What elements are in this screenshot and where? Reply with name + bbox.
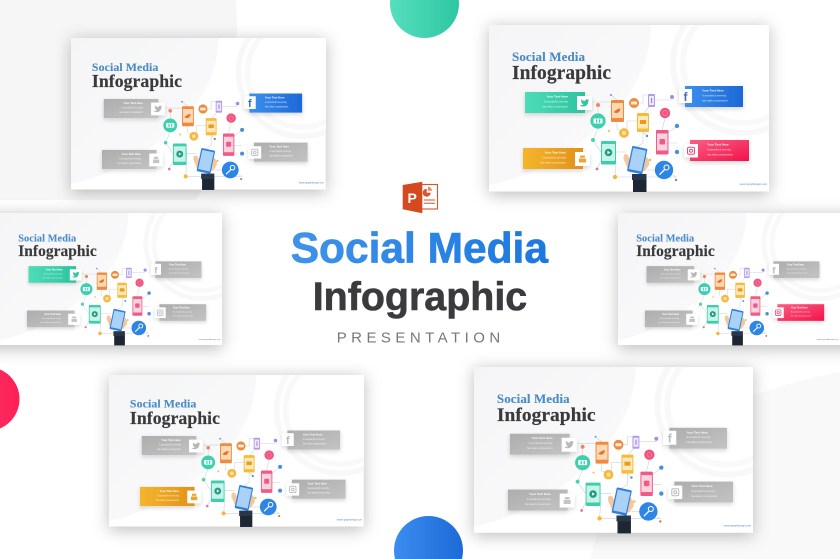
slide 5 callout: twitter: has taken possession	[157, 448, 182, 451]
decorative circle: teal	[390, 0, 459, 38]
slide 4 callout: youtube: Your Text Here	[662, 313, 680, 316]
slide 4 callout: instagram: A wonderful serenity	[791, 311, 811, 314]
slide 4 callout: twitter: has taken possession	[660, 276, 681, 279]
slide 5 callout: youtube: A wonderful serenity	[157, 494, 180, 497]
slide 5 network illustration	[201, 438, 282, 527]
slide 6 title	[497, 391, 596, 426]
slide 1 callout: twitter	[104, 99, 165, 118]
slide 1 callout: instagram	[248, 143, 308, 162]
slide 1 title	[92, 60, 182, 91]
slide 3 title	[18, 234, 97, 260]
slide 6 callout: youtube: A wonderful serenity	[527, 497, 551, 501]
slide 6 callout: twitter	[510, 434, 577, 455]
slide 2 callout: twitter: has taken possession	[542, 104, 568, 108]
slide 1 callout: facebook: A wonderful serenity	[265, 101, 288, 104]
slide 1 callout: youtube: A wonderful serenity	[119, 157, 142, 160]
slide 1 callout: facebook: f	[248, 98, 252, 110]
slide 6 callout: instagram: has taken possession	[691, 494, 718, 498]
slide 4: red instagram callout	[618, 185, 840, 345]
slide 2 callout: youtube: has taken possession	[540, 160, 566, 164]
slide 2: all colored callouts	[489, 0, 816, 192]
slide 2 callout: twitter: A wonderful serenity	[544, 100, 569, 104]
slide 5 callout: twitter: A wonderful serenity	[159, 444, 182, 447]
slide 6 callout: youtube	[508, 490, 575, 510]
slide 6 callout: instagram	[668, 482, 733, 503]
slide 2 callout: instagram: Your Text Here	[707, 142, 729, 146]
slide 2 title: Infographic	[512, 63, 611, 84]
slide 2 callout: youtube: A wonderful serenity	[542, 156, 567, 160]
slide 3 callout: twitter	[29, 266, 82, 283]
slide 5 callout: facebook: f	[286, 435, 290, 447]
slide 1 callout: instagram: Your Text Here	[269, 145, 289, 149]
slide 4 callout: facebook: has taken possession	[787, 272, 808, 275]
subtitle: Presentation: PRESENTATION	[337, 329, 500, 346]
slide 5 callout: twitter	[142, 436, 203, 455]
slide 4 callout: twitter: A wonderful serenity	[662, 272, 682, 275]
slide 5 callout: facebook: Your Text Here	[303, 433, 323, 437]
slide 2 callout: facebook: A wonderful serenity	[702, 94, 727, 98]
slide 6: all gray callouts	[474, 332, 800, 533]
slide 4 callout: facebook: A wonderful serenity	[787, 268, 807, 271]
slide 6 network illustration	[575, 436, 664, 533]
slide 2 callout: youtube: Your Text Here	[544, 150, 566, 154]
slide 1 callout: twitter: has taken possession	[119, 111, 144, 114]
slide 5 callout: youtube: Your Text Here	[159, 489, 179, 493]
slide 3 callout: facebook: has taken possession	[169, 272, 190, 275]
slide 1 callout: youtube	[102, 150, 163, 169]
icon: PowerPoint logo	[403, 182, 438, 213]
slide 4 title: Infographic	[636, 243, 715, 260]
icon: PowerPoint logo: P	[408, 190, 417, 206]
slide 3 network illustration	[80, 268, 151, 345]
slide 5 callout: facebook: has taken possession	[303, 443, 327, 446]
slide 5 callout: instagram: Your Text Here	[307, 482, 327, 486]
slide 4 callout: youtube: has taken possession	[659, 321, 680, 324]
slide 3 callout: instagram: Your Text Here	[173, 307, 190, 310]
slide 6 callout: twitter: has taken possession	[527, 446, 553, 450]
slide 2 callout: instagram: has taken possession	[707, 152, 733, 156]
slide 6 callout: facebook: A wonderful serenity	[686, 435, 711, 439]
slide 6 title: Infographic	[497, 405, 596, 426]
slide 3 callout: youtube: has taken possession	[41, 321, 62, 324]
slide 6 callout: facebook	[663, 428, 727, 449]
slide 2 callout: instagram	[684, 140, 749, 161]
slide 1 network illustration	[163, 101, 244, 190]
slide 3 callout: instagram	[155, 304, 206, 321]
slide 4 callout: facebook	[769, 261, 819, 278]
slide 2 callout: youtube	[523, 148, 590, 169]
slide 1 callout: twitter: Your Text Here	[123, 101, 143, 105]
slide 4 callout: twitter	[647, 266, 700, 283]
slide 1 callout: youtube: Your Text Here	[121, 152, 141, 156]
slide 6 callout: twitter: A wonderful serenity	[529, 441, 553, 445]
slide 4 callout: instagram	[773, 304, 824, 321]
slide 1 callout: facebook: has taken possession	[265, 106, 289, 109]
slide 3 callout: facebook	[151, 261, 201, 278]
slide 3 callout: youtube: A wonderful serenity	[42, 317, 62, 320]
decorative circle: red	[0, 367, 20, 431]
slide 3 callout: twitter: Your Text Here	[46, 268, 63, 271]
slide 5 title: Infographic	[130, 408, 220, 428]
slide 2 callout: facebook: has taken possession	[702, 98, 728, 102]
slide 3 callout: instagram: has taken possession	[173, 314, 194, 317]
slide 1 callout: facebook: Your Text Here	[265, 96, 285, 100]
slide 2 title: Social Media	[512, 49, 586, 64]
slide 2 callout: facebook: f	[684, 90, 688, 104]
slide 6 callout: facebook: f	[668, 432, 672, 446]
slide 3 callout: twitter: has taken possession	[42, 276, 63, 279]
slide 4 callout: youtube	[645, 311, 698, 327]
slide 1 callout: instagram: A wonderful serenity	[269, 150, 292, 153]
slide 2 callout: twitter: Your Text Here	[546, 94, 568, 98]
slide 1 website: www.ngraphdesign.com	[299, 182, 324, 185]
slide 4 callout: instagram: has taken possession	[791, 314, 812, 317]
slide 2 callout: twitter	[525, 92, 592, 113]
slide 5 title	[130, 397, 220, 428]
slide 6 callout: instagram: Your Text Here	[691, 484, 713, 488]
main title: Social Media: Social Media	[291, 225, 549, 273]
slide 1 callout: facebook	[244, 94, 302, 113]
slide 5 callout: facebook	[282, 431, 340, 450]
slide 5 callout: instagram: has taken possession	[307, 492, 331, 495]
slide 4 title	[636, 234, 715, 260]
slide 3: teal twitter callout	[0, 185, 259, 345]
slide 6 callout: youtube: Your Text Here	[529, 492, 551, 496]
slide 1: blue facebook callout	[71, 6, 369, 190]
slide 5 callout: youtube: has taken possession	[156, 499, 180, 502]
slide 2 website: www.ngraphdesign.com	[739, 182, 767, 186]
slide 6 callout: facebook: has taken possession	[686, 440, 713, 444]
slide 6 callout: instagram: A wonderful serenity	[691, 489, 716, 493]
slide 3 callout: twitter: A wonderful serenity	[44, 272, 64, 275]
slide 4 title: Social Media	[636, 234, 694, 245]
slide 6 callout: facebook: Your Text Here	[686, 430, 708, 434]
slide 1 title: Social Media	[92, 60, 158, 74]
slide 4 network illustration	[698, 268, 769, 345]
slide 4 callout: facebook: Your Text Here	[787, 264, 805, 267]
background soft panel bottom right	[590, 372, 840, 559]
decorative circle: blue	[394, 516, 463, 559]
slide 4 website: www.ngraphdesign.com	[817, 338, 839, 341]
slide 2 network illustration	[590, 94, 679, 192]
slide 3 title: Social Media	[18, 234, 76, 245]
slide 2 callout: instagram: A wonderful serenity	[707, 148, 732, 152]
slide 6 title: Social Media	[497, 391, 570, 406]
slide 1 callout: instagram: has taken possession	[269, 155, 293, 158]
slide 4 callout: instagram: Your Text Here	[791, 307, 808, 310]
slide 6 callout: twitter: Your Text Here	[531, 436, 553, 440]
slide 3 callout: instagram: A wonderful serenity	[173, 311, 193, 314]
slide 5 title: Social Media	[130, 397, 196, 411]
slide 5 callout: instagram: A wonderful serenity	[307, 487, 330, 490]
slide 3 callout: facebook: f	[154, 265, 158, 276]
slide 1 callout: twitter: A wonderful serenity	[121, 107, 144, 110]
slide 3 callout: youtube	[27, 311, 80, 327]
background soft panel top left	[0, 0, 237, 200]
slide 3 title: Infographic	[18, 243, 97, 260]
slide 3 callout: youtube: Your Text Here	[44, 313, 62, 316]
slide 5 callout: instagram	[286, 480, 346, 499]
slide 4 callout: facebook: f	[772, 265, 776, 276]
slide 1 title: Infographic	[92, 71, 182, 91]
slide 5: orange youtube callout	[109, 343, 407, 527]
main title: Infographic: Infographic	[313, 275, 527, 319]
slide 4 callout: twitter: Your Text Here	[664, 268, 681, 271]
slide 2 title	[512, 49, 611, 84]
slide 5 callout: youtube	[140, 487, 201, 506]
slide 5 website: www.ngraphdesign.com	[337, 519, 362, 522]
slide 2 callout: facebook	[679, 86, 743, 107]
slide 6 callout: youtube: has taken possession	[525, 502, 551, 506]
slide 1 callout: youtube: has taken possession	[118, 162, 142, 165]
slide 5 callout: twitter: Your Text Here	[161, 438, 181, 442]
slide 3 callout: facebook: Your Text Here	[169, 264, 187, 267]
slide 4 callout: youtube: A wonderful serenity	[660, 317, 680, 320]
slide 2 callout: facebook: Your Text Here	[702, 88, 724, 92]
slide 3 callout: facebook: A wonderful serenity	[169, 268, 189, 271]
slide 6 website: www.ngraphdesign.com	[724, 523, 751, 527]
slide 5 callout: facebook: A wonderful serenity	[303, 438, 326, 441]
slide 3 website: www.ngraphdesign.com	[199, 338, 221, 341]
